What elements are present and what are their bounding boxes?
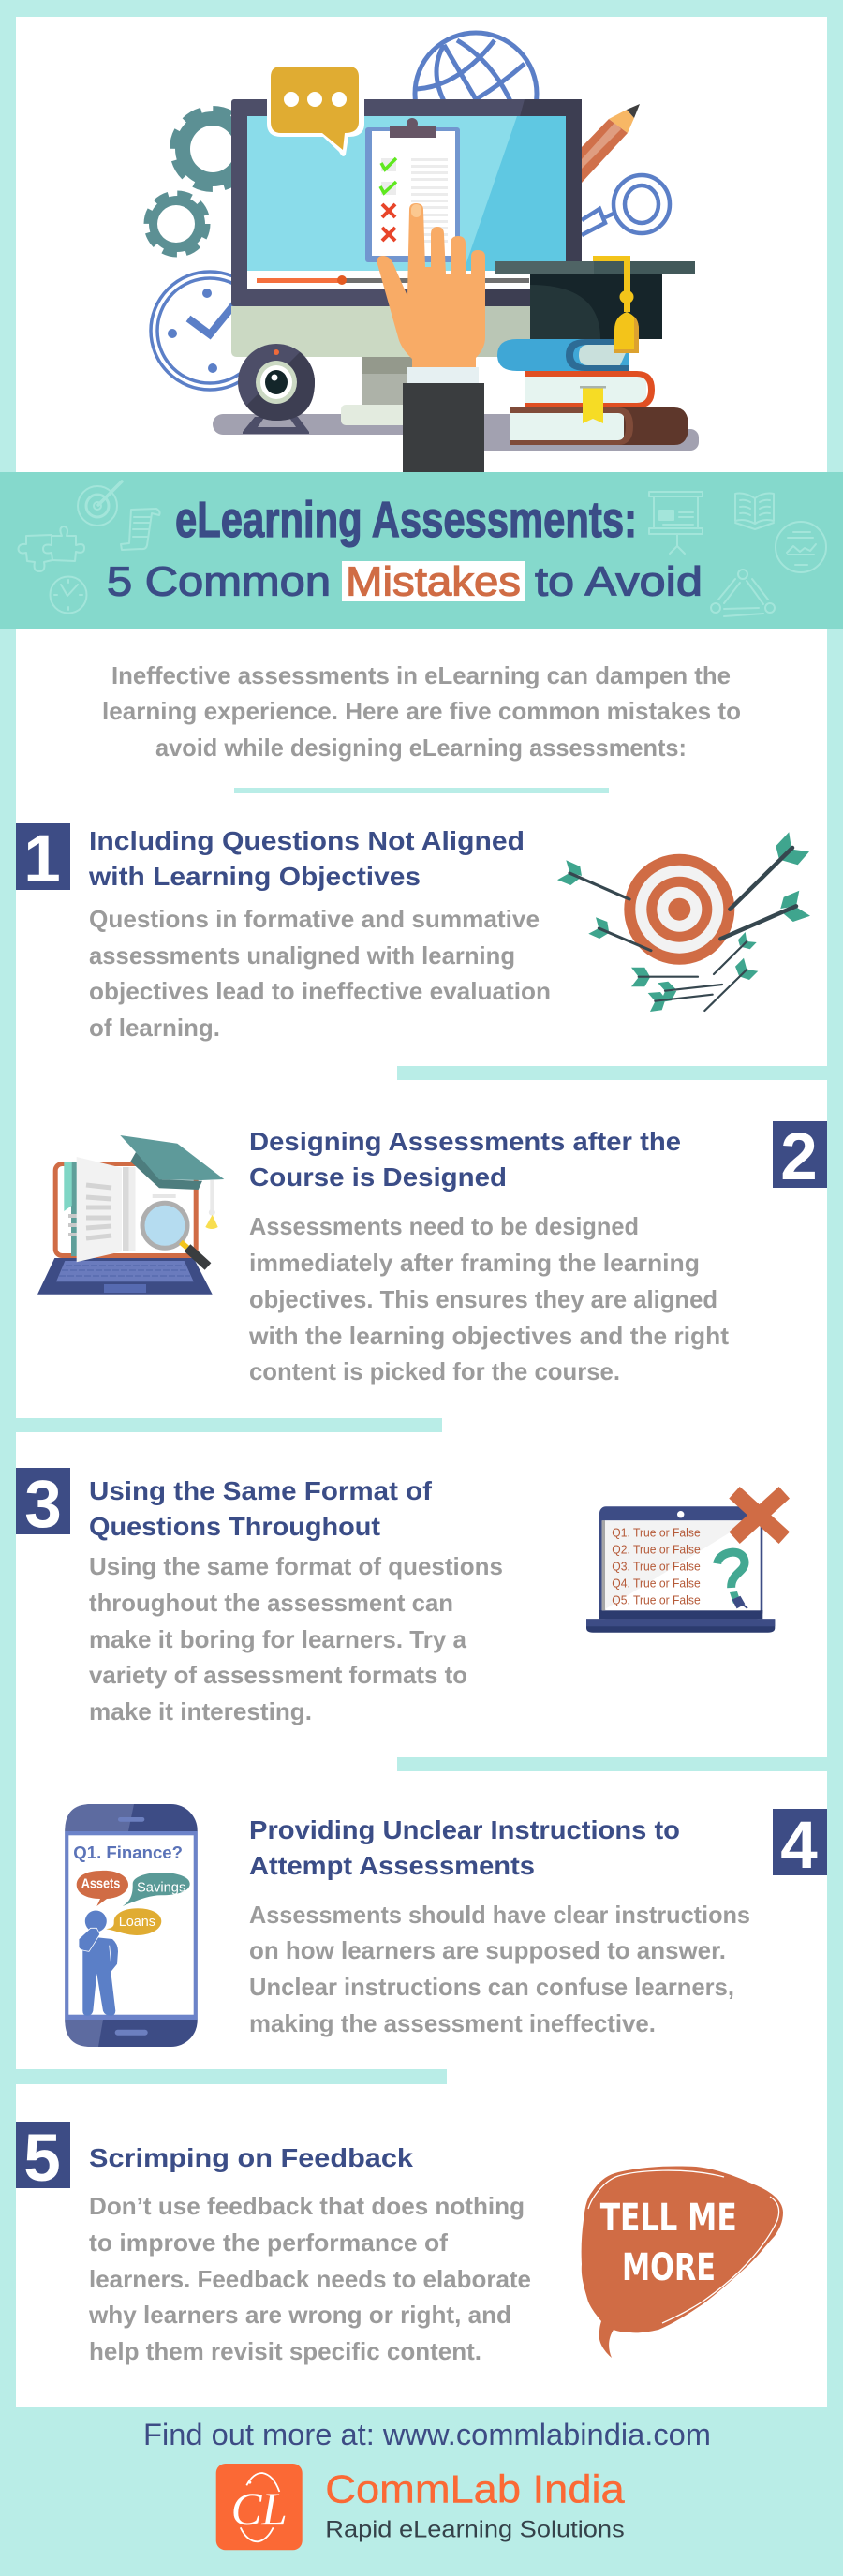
body 2: objectives. This ensures they are aligned [249, 1285, 717, 1313]
title line 2: Mistakes [346, 558, 521, 605]
icon: tell me more speech bubble: MORE [622, 2246, 716, 2289]
section 2: assessments after course [37, 1120, 827, 1385]
icon: clipboard with checks [365, 118, 460, 262]
icon: monitor stand [213, 357, 699, 451]
body 2: with the learning objectives and the right [248, 1322, 729, 1350]
tagline: Rapid eLearning Solutions [325, 2516, 625, 2542]
body 2 [248, 1212, 729, 1385]
intro text [102, 661, 741, 762]
heading 1: with Learning Objectives [88, 862, 421, 891]
body 4: making the assessment ineffective. [249, 2009, 656, 2037]
title banner [0, 472, 843, 629]
body 5: why learners are wrong or right, and [88, 2301, 511, 2329]
heading 1 [88, 826, 525, 891]
icon: books [497, 339, 688, 445]
section 1: misaligned questions [16, 822, 810, 1042]
body 2: Assessments need to be designed [249, 1212, 639, 1240]
heading 5: Scrimping on Feedback [89, 2143, 413, 2172]
body 5: to improve the performance of [89, 2228, 448, 2257]
number badge 3 [16, 1468, 70, 1542]
body 1: objectives lead to ineffective evaluation [89, 977, 551, 1005]
section 3: same question format [16, 1468, 784, 1725]
intro text: learning experience. Here are five common mistakes to [102, 697, 741, 725]
title line 2: 5 Common [107, 558, 331, 605]
icon: laptop quiz [586, 1492, 784, 1633]
body 3: variety of assessment formats to [89, 1661, 467, 1689]
icon: pencil [582, 104, 640, 183]
body 1 [89, 905, 551, 1042]
number badge 1 [16, 822, 70, 896]
number badge 2: 2 [780, 1120, 818, 1194]
heading 2: Course is Designed [249, 1162, 507, 1192]
heading 4 [249, 1815, 680, 1880]
body 1: Questions in formative and summative [89, 905, 540, 933]
body 5 [88, 2192, 531, 2365]
icon: phone with question: Loans [119, 1914, 155, 1930]
icon: monitor [231, 99, 582, 357]
body 3: Using the same format of questions [89, 1552, 503, 1580]
body 5: learners. Feedback needs to elaborate [89, 2265, 531, 2293]
section 4: unclear instructions [65, 1804, 827, 2047]
heading 2: Designing Assessments after the [249, 1127, 681, 1156]
section 5: scrimping on feedback [16, 2122, 783, 2365]
heading 3 [89, 1476, 433, 1541]
icon: magnifier ring [582, 175, 670, 235]
body 5: Don’t use feedback that does nothing [89, 2192, 525, 2220]
body 3: throughout the assessment can [89, 1589, 453, 1617]
icon: phone with question: Savings [137, 1879, 185, 1895]
icon: large gear [174, 111, 251, 187]
hero illustration: computer, hand, books [148, 33, 699, 472]
icon: CommLab logo mark [216, 2464, 303, 2550]
body 1: of learning. [89, 1014, 220, 1042]
icon: tell me more speech bubble: TELL ME [600, 2197, 737, 2240]
icon: target with arrows [557, 832, 810, 1012]
heading 4: Attempt Assessments [249, 1851, 535, 1880]
heading 1: Including Questions Not Aligned [89, 826, 525, 855]
title line 2: to Avoid [535, 558, 702, 605]
heading 4: Providing Unclear Instructions to [249, 1815, 680, 1844]
icon: clock [151, 272, 269, 390]
body 3: make it interesting. [89, 1697, 312, 1725]
heading 3: Questions Throughout [89, 1512, 380, 1541]
icon: phone with question: Assets [81, 1876, 120, 1892]
title line 1: eLearning Assessments: [175, 492, 637, 548]
body 4: Assessments should have clear instructions [249, 1901, 750, 1929]
icon: phone with question [65, 1804, 198, 2047]
icon: laptop quiz: Q4. True or False [612, 1577, 701, 1591]
number badge 4 [773, 1809, 827, 1883]
body 3 [89, 1552, 503, 1725]
footer logo [216, 2464, 625, 2550]
icon: speech bubble [267, 65, 364, 156]
heading 3: Using the Same Format of [89, 1476, 433, 1505]
icon: graduation cap [495, 256, 695, 353]
icon: laptop quiz: Q2. True or False [612, 1543, 701, 1557]
body 4 [249, 1901, 750, 2037]
icon: laptop quiz: Q1. True or False [612, 1526, 701, 1540]
number badge 3: 3 [24, 1468, 62, 1542]
body 5: help them revisit specific content. [89, 2337, 481, 2365]
number badge 4: 4 [780, 1809, 818, 1883]
body 3: make it boring for learners. Try a [89, 1625, 467, 1653]
number badge 1: 1 [23, 822, 61, 896]
body 4: on how learners are supposed to answer. [249, 1936, 726, 1964]
brand name: CommLab India [325, 2467, 625, 2511]
icon: small gear [148, 195, 206, 253]
number badge 2 [773, 1120, 827, 1194]
title line 2 [107, 558, 702, 605]
footer link: Find out more at: www.commlabindia.com [143, 2418, 711, 2451]
body 2: immediately after framing the learning [249, 1249, 700, 1277]
icon: tell me more speech bubble [582, 2167, 783, 2358]
icon: globe [415, 33, 537, 155]
intro text: Ineffective assessments in eLearning can dampen the [111, 661, 731, 689]
icon: laptop quiz: Q3. True or False [612, 1560, 701, 1574]
body 4: Unclear instructions can confuse learners, [249, 1973, 734, 2001]
number badge 5: 5 [23, 2122, 61, 2196]
body 2: content is picked for the course. [249, 1357, 620, 1385]
banner background icons [19, 481, 826, 616]
body 1: assessments unaligned with learning [89, 941, 515, 970]
intro text: avoid while designing eLearning assessments: [155, 733, 687, 762]
icon: phone with question: Q1. Finance? [73, 1843, 183, 1862]
number badge 5 [16, 2122, 70, 2196]
icon: open book on laptop [37, 1135, 224, 1295]
icon: webcam [238, 344, 315, 434]
icon: hand and arm [377, 203, 485, 472]
heading 2 [249, 1127, 681, 1192]
icon: CommLab logo mark: CL [231, 2482, 288, 2535]
icon: laptop quiz: Q5. True or False [612, 1593, 701, 1607]
